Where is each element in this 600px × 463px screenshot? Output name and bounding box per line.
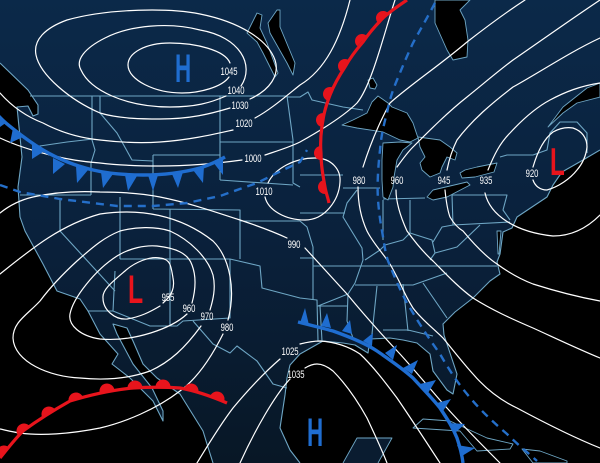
isobar 960 east bbox=[396, 0, 600, 358]
pressure labels: 935 bbox=[480, 175, 492, 187]
high pressure letter south: H bbox=[307, 410, 323, 455]
pressure labels: 1025 bbox=[281, 346, 299, 358]
low pressure letter northeast: L bbox=[550, 140, 565, 183]
warm front north bbox=[314, 0, 407, 203]
pressure labels: 1045 bbox=[220, 66, 238, 78]
pressure labels: 955 bbox=[162, 292, 174, 304]
pressure labels: 980 bbox=[221, 322, 233, 334]
isobar 920 bbox=[533, 128, 587, 190]
isobar 955 bbox=[103, 258, 174, 319]
isobar 935 bbox=[485, 83, 600, 236]
isobar 1035 bbox=[240, 364, 387, 463]
isobar 960 bbox=[70, 246, 195, 339]
isobar 980 loop bbox=[0, 212, 232, 434]
isobar 980 east bbox=[358, 0, 600, 448]
pressure labels: 920 bbox=[526, 168, 538, 180]
pressure labels: 1035 bbox=[287, 369, 305, 381]
lake Ontario bbox=[460, 163, 497, 178]
Hudson Bay inlet bbox=[435, 0, 470, 60]
isobar 1010 bbox=[265, 158, 340, 220]
cold front south bbox=[298, 308, 475, 463]
dashed front east bbox=[378, 3, 537, 461]
pressure labels: 960 bbox=[183, 303, 195, 315]
small lake bbox=[368, 78, 377, 89]
isobar 970 bbox=[13, 228, 214, 379]
pressure labels bbox=[162, 66, 538, 381]
isobar 1030 bbox=[36, 10, 276, 119]
pressure labels: 1030 bbox=[231, 100, 249, 112]
Cuba bbox=[413, 419, 513, 451]
isobar 945 bbox=[445, 38, 600, 301]
isobar 1020 bbox=[0, 0, 350, 143]
pressure labels: 1020 bbox=[235, 118, 253, 130]
isobar 1025 bbox=[197, 341, 440, 463]
pressure labels: 1010 bbox=[255, 186, 273, 198]
lake Erie bbox=[427, 182, 470, 200]
high pressure letter north: H bbox=[175, 46, 191, 91]
isobar 1045 bbox=[128, 43, 230, 93]
pressure labels: 990 bbox=[288, 239, 300, 251]
pressure labels: 970 bbox=[201, 311, 213, 323]
pressure labels: 945 bbox=[438, 175, 450, 187]
lake Michigan bbox=[382, 142, 412, 200]
isobar 990 bbox=[0, 192, 500, 463]
cold front north bbox=[0, 115, 225, 191]
pressure labels: 1000 bbox=[244, 153, 262, 165]
pressure labels: 980 bbox=[353, 175, 365, 187]
Chesapeake bay bbox=[497, 231, 501, 254]
Yucatan bbox=[343, 438, 392, 463]
lakes and inland water bbox=[247, 0, 600, 463]
isobar 1040 bbox=[79, 26, 246, 107]
low pressure letter southwest: L bbox=[128, 268, 143, 313]
Hispaniola bbox=[522, 449, 567, 463]
lake Winnipegosis bbox=[247, 13, 278, 77]
pressure labels: 960 bbox=[391, 175, 403, 187]
gulf of St Lawrence bbox=[548, 83, 600, 127]
warm front south bbox=[0, 379, 227, 459]
pressure labels: 1040 bbox=[227, 85, 245, 97]
dashed front west bbox=[0, 150, 307, 206]
lake Superior bbox=[342, 96, 418, 142]
lake Huron bbox=[418, 137, 457, 177]
lake Winnipeg bbox=[268, 10, 295, 75]
isobar 1000 bbox=[0, 0, 395, 166]
